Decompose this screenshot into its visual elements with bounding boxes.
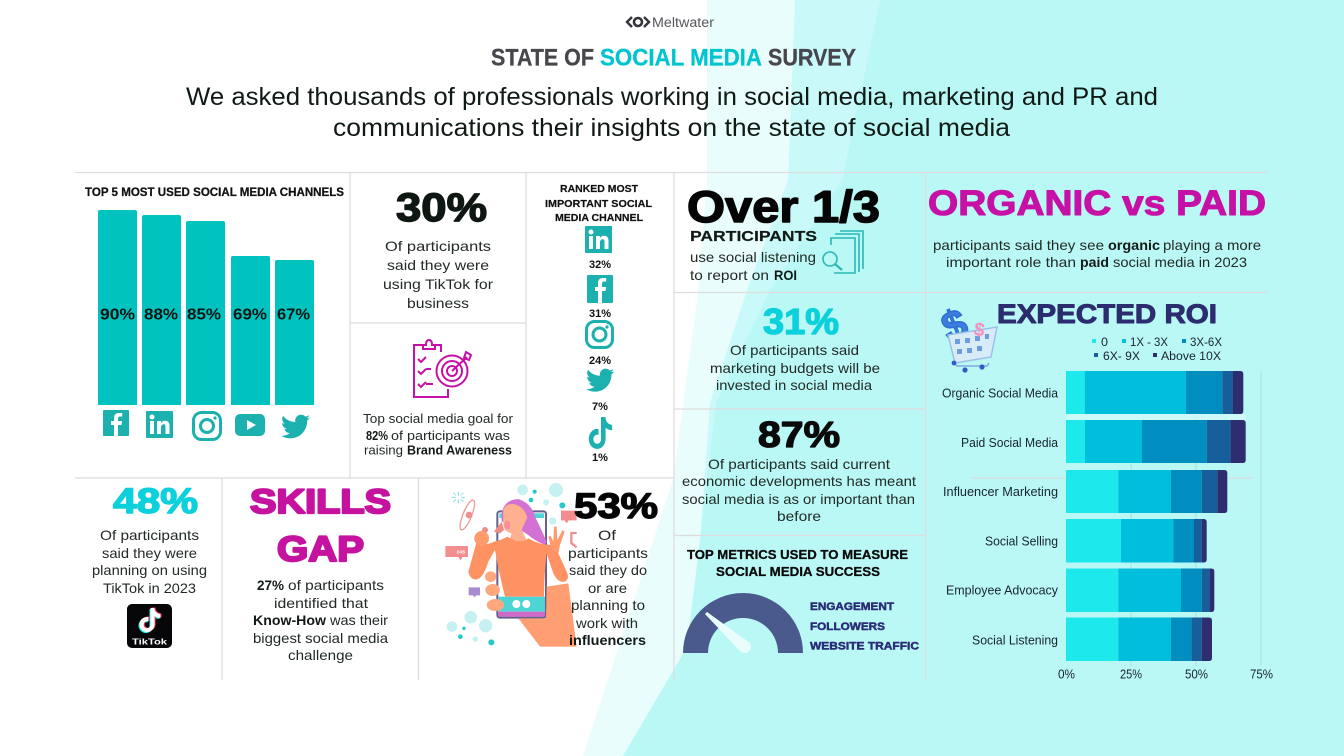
panel: over 1/3 social listening bbox=[687, 183, 880, 283]
text block: Top social media goal for bbox=[363, 412, 513, 426]
category labels: Organic Social Media bbox=[942, 386, 1059, 400]
text block bbox=[710, 342, 880, 393]
metric labels bbox=[810, 601, 919, 652]
stat: 87%: 87% bbox=[758, 414, 840, 455]
text block: social media in 2023 bbox=[1113, 254, 1247, 270]
channel percentages: 7% bbox=[592, 401, 608, 413]
text block: identified that bbox=[274, 595, 368, 611]
heading: skills gap bbox=[250, 483, 391, 569]
title: STATE OF bbox=[491, 44, 594, 72]
text block: planning to bbox=[571, 597, 645, 613]
text block: ROI bbox=[774, 267, 797, 283]
title: SOCIAL MEDIA bbox=[600, 44, 762, 72]
heading: top metrics bbox=[687, 547, 908, 579]
category labels: Social Selling bbox=[985, 534, 1058, 548]
stat: over 1/3: Over 1/3 bbox=[687, 183, 880, 232]
metric labels: ENGAGEMENT bbox=[810, 601, 894, 613]
text block bbox=[383, 238, 493, 311]
text block: was their bbox=[329, 612, 388, 628]
text block: paid bbox=[1080, 254, 1109, 270]
icon: instagram bbox=[586, 322, 612, 348]
category labels: Influencer Marketing bbox=[943, 484, 1058, 499]
heading: ranked channel: RANKED MOST bbox=[560, 184, 638, 195]
icon: twitter bbox=[586, 369, 614, 392]
channel percentages: 24% bbox=[589, 355, 611, 367]
legend: 3X-6X bbox=[1190, 337, 1222, 349]
icon: facebook bbox=[103, 410, 129, 436]
bar chart: channel usage: 69% bbox=[233, 306, 267, 324]
title bbox=[491, 44, 856, 72]
panel: organic vs paid bbox=[928, 184, 1266, 270]
text block: participants said they see bbox=[933, 237, 1104, 253]
icon: linkedin bbox=[146, 411, 173, 438]
text block: biggest social media bbox=[253, 630, 388, 646]
icon: shopping cart with money: $ bbox=[935, 299, 974, 351]
row: employee advocacy bbox=[1066, 568, 1214, 612]
icon: shopping cart with money bbox=[935, 299, 997, 373]
heading: skills gap: GAP bbox=[277, 529, 364, 569]
category labels: Employee Advocacy bbox=[946, 582, 1058, 598]
axis labels: 50% bbox=[1185, 668, 1208, 682]
heading: top metrics: SOCIAL MEDIA SUCCESS bbox=[716, 564, 880, 579]
icon: twitter bbox=[281, 415, 310, 438]
channel percentages bbox=[589, 259, 611, 464]
heading: ranked channel bbox=[545, 184, 652, 224]
text block: work with bbox=[575, 615, 638, 631]
text block: economic developments has meant bbox=[682, 473, 916, 489]
legend: 1X - 3X bbox=[1130, 337, 1168, 349]
panel: ranked most important channel bbox=[545, 184, 652, 464]
illustration: influencer on phone: 245 bbox=[457, 549, 465, 555]
grid lines bbox=[75, 172, 1268, 681]
subheading: participants: PARTICIPANTS bbox=[690, 228, 817, 245]
icon: linkedin bbox=[585, 226, 612, 253]
subtitle: communications their insights on the state of social media bbox=[333, 114, 1010, 142]
text block bbox=[253, 577, 388, 663]
text block: TikTok in 2023 bbox=[103, 580, 196, 596]
legend bbox=[1092, 337, 1222, 363]
heading: ranked channel: MEDIA CHANNEL bbox=[555, 213, 643, 224]
panel: 30% TikTok for business bbox=[383, 186, 493, 311]
icon: tiktok badge bbox=[127, 604, 172, 648]
text block: said they do bbox=[569, 562, 647, 578]
text block: 27% bbox=[257, 577, 285, 593]
row: influencer marketing bbox=[1066, 470, 1227, 513]
text block: 82% bbox=[366, 428, 388, 443]
text block: Of participants said bbox=[730, 342, 859, 358]
icon: facebook bbox=[587, 275, 613, 303]
subtitle: We asked thousands of professionals working in social media, marketing and PR and bbox=[186, 83, 1158, 111]
text block: social media is as or important than bbox=[682, 491, 915, 507]
text block bbox=[92, 527, 207, 596]
category labels: Social Listening bbox=[972, 632, 1058, 648]
heading: skills gap: SKILLS bbox=[250, 483, 391, 521]
stat: 31%: 31% bbox=[763, 301, 839, 342]
metric labels: FOLLOWERS bbox=[810, 621, 885, 633]
axis labels: 25% bbox=[1120, 668, 1142, 682]
stat: 53%: 53% bbox=[574, 487, 658, 526]
heading: expected ROI: EXPECTED ROI bbox=[997, 299, 1217, 329]
stat: 30%: 30% bbox=[396, 186, 487, 230]
axis labels bbox=[1058, 668, 1273, 682]
bar chart: channel usage: 88% bbox=[144, 306, 178, 324]
icon: documents with magnifier bbox=[823, 231, 863, 273]
legend: Above 10X bbox=[1161, 351, 1221, 363]
panel: top 5 channels bbox=[85, 187, 344, 440]
text block: marketing budgets will be bbox=[710, 360, 880, 376]
illustration: influencer on phone bbox=[445, 483, 577, 647]
row: social listening bbox=[1066, 618, 1212, 661]
text block: Brand Awareness bbox=[407, 444, 512, 458]
bar chart: channel usage bbox=[98, 210, 314, 405]
title: SURVEY bbox=[768, 44, 856, 72]
text block: using TikTok for bbox=[383, 276, 493, 292]
panel: 48% planning TikTok bbox=[92, 482, 207, 648]
panel: top metrics bbox=[683, 547, 919, 653]
text block: before bbox=[777, 508, 821, 524]
icon: youtube bbox=[235, 414, 265, 436]
panel: 87% economic developments bbox=[682, 414, 916, 524]
logo: Meltwater: Meltwater bbox=[652, 15, 715, 30]
subtitle bbox=[186, 83, 1158, 142]
text block: invested in social media bbox=[716, 377, 872, 393]
channel percentages: 31% bbox=[589, 308, 611, 320]
legend: 0 bbox=[1101, 337, 1108, 349]
panel: brand awareness goal bbox=[363, 340, 513, 458]
text block: of participants was bbox=[391, 429, 510, 443]
text block: organic bbox=[1108, 237, 1160, 253]
text block bbox=[933, 237, 1261, 270]
text block: challenge bbox=[288, 647, 353, 663]
text block: of participants bbox=[288, 577, 384, 593]
logo: Meltwater bbox=[627, 15, 715, 30]
text block: use social listening bbox=[690, 249, 816, 265]
bar chart: channel usage: 85% bbox=[187, 306, 221, 324]
text block: raising bbox=[364, 444, 403, 458]
heading: top metrics: TOP METRICS USED TO MEASURE bbox=[687, 547, 908, 562]
row: paid social media bbox=[1066, 420, 1246, 463]
heading: top 5 channels: TOP 5 MOST USED SOCIAL MEDIA CHANNELS bbox=[85, 187, 344, 199]
heading: organic vs paid: ORGANIC vs PAID bbox=[928, 184, 1266, 223]
text block: participants bbox=[568, 545, 648, 561]
text block: or are bbox=[588, 580, 627, 596]
icon: shopping cart with money: $ bbox=[972, 319, 987, 342]
text block: said they were bbox=[387, 257, 489, 273]
panel: skills gap bbox=[250, 483, 391, 663]
text block: Of participants bbox=[385, 238, 491, 254]
panel: influencers bbox=[445, 483, 658, 648]
stacked bar chart bbox=[1066, 371, 1261, 666]
metric labels: WEBSITE TRAFFIC bbox=[810, 640, 919, 652]
channel percentages: 32% bbox=[589, 259, 611, 271]
bar chart: channel usage: 90% bbox=[100, 306, 135, 324]
row: social selling bbox=[1066, 519, 1207, 562]
text block: Of participants bbox=[100, 527, 199, 543]
row: organic social media bbox=[1066, 371, 1243, 414]
icon: tiktok bbox=[589, 417, 612, 449]
panel: 31% budgets bbox=[710, 301, 880, 393]
text block: influencers bbox=[569, 632, 646, 648]
text block bbox=[568, 527, 648, 648]
bar chart: channel usage: 67% bbox=[277, 306, 310, 324]
icon: tiktok badge: TikTok bbox=[132, 636, 167, 646]
text block bbox=[363, 412, 513, 458]
text block: Of participants said current bbox=[708, 456, 890, 472]
text block bbox=[682, 456, 916, 524]
text block: planning on using bbox=[92, 562, 207, 578]
heading: ranked channel: IMPORTANT SOCIAL bbox=[545, 199, 652, 210]
text block: business bbox=[407, 295, 469, 311]
icon: instagram bbox=[194, 412, 220, 440]
stat: 48%: 48% bbox=[113, 482, 198, 521]
category labels: Paid Social Media bbox=[961, 435, 1059, 450]
channel percentages: 1% bbox=[592, 452, 608, 464]
axis labels: 75% bbox=[1250, 668, 1273, 682]
icon: clipboard with target bbox=[414, 340, 471, 397]
axis labels: 0% bbox=[1058, 668, 1075, 682]
panel: expected ROI bbox=[935, 299, 1273, 682]
gauge bbox=[683, 593, 803, 653]
legend: 6X- 9X bbox=[1103, 351, 1140, 363]
text block: Know-How bbox=[253, 612, 326, 628]
text block bbox=[690, 249, 816, 283]
text block: important role than bbox=[946, 254, 1076, 270]
text block: said they were bbox=[102, 545, 197, 561]
text block: Of bbox=[598, 527, 616, 543]
text block: to report on bbox=[690, 267, 769, 283]
category labels bbox=[942, 386, 1059, 648]
text block: playing a more bbox=[1163, 237, 1261, 253]
